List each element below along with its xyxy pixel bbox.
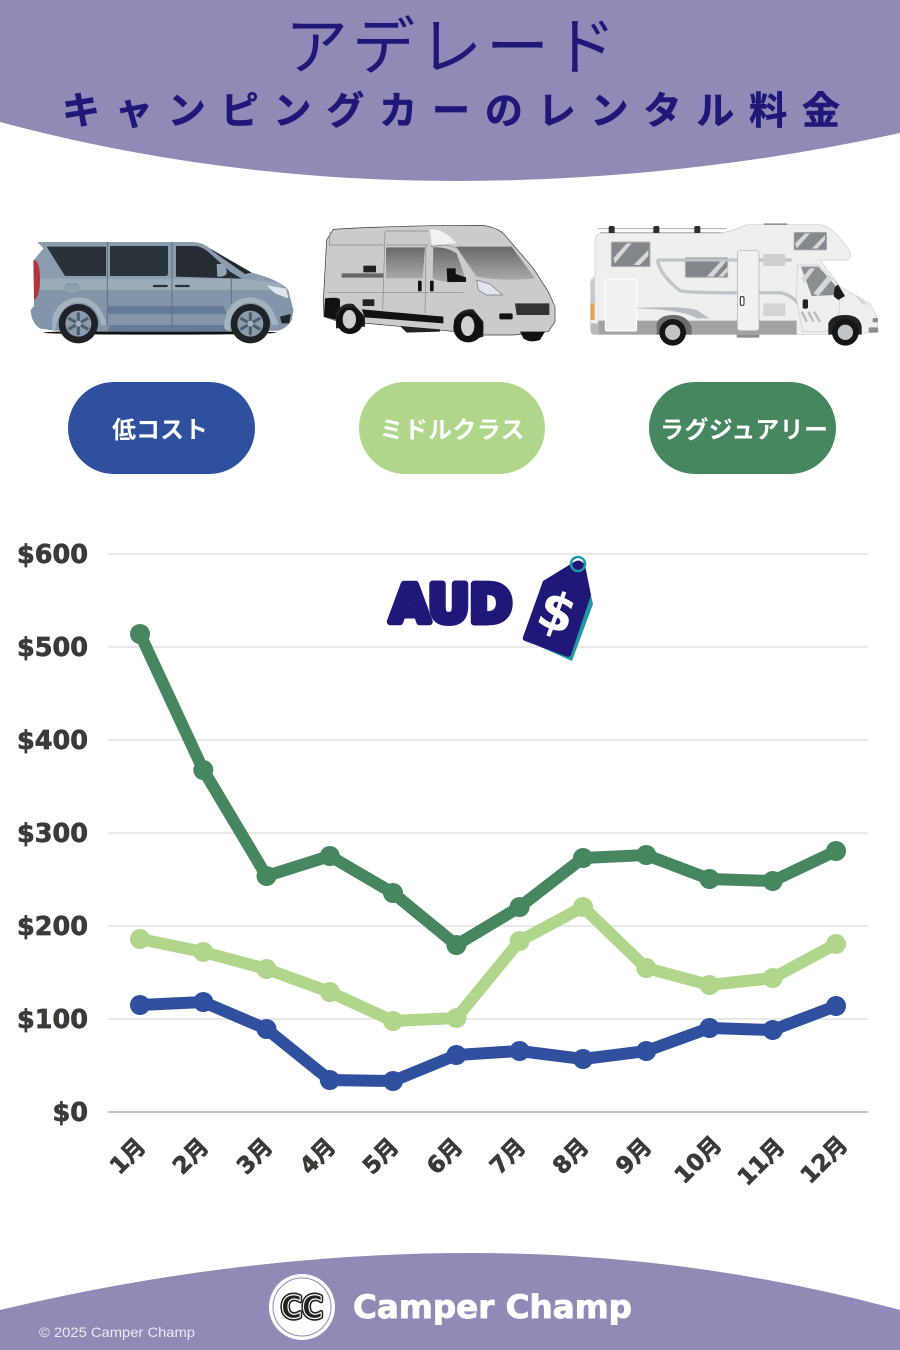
brand name: Camper Champ <box>353 1288 632 1326</box>
title: アデレード <box>285 13 616 83</box>
icon: price tag <box>523 557 593 661</box>
logo: Camper Champ: CC <box>281 1290 323 1326</box>
vehicle: panel van <box>323 225 555 342</box>
footer banner <box>0 1253 900 1350</box>
y axis labels: $500 <box>17 633 88 663</box>
y axis labels: $200 <box>17 912 88 942</box>
pill: middle class: ミドルクラス <box>380 417 524 444</box>
x axis labels: 12月 <box>796 1132 853 1189</box>
vehicle: minivan <box>31 242 293 343</box>
x axis labels: 3月 <box>232 1134 278 1180</box>
pill: low cost <box>68 382 255 474</box>
currency label: AUD <box>390 575 512 635</box>
logo: Camper Champ <box>269 1274 335 1340</box>
x axis labels: 8月 <box>548 1134 594 1180</box>
x axis labels: 5月 <box>358 1134 404 1180</box>
pill: middle class <box>359 382 545 474</box>
y axis labels: $100 <box>17 1005 88 1035</box>
pill: low cost: 低コスト <box>112 417 208 444</box>
copyright: © 2025 Camper Champ <box>39 1324 195 1340</box>
series: luxury <box>130 624 846 955</box>
vehicle: motorhome <box>590 224 878 346</box>
x axis labels: 9月 <box>611 1134 657 1180</box>
subtitle: キャンピングカーのレンタル料金 <box>62 91 840 133</box>
x axis labels: 10月 <box>670 1132 727 1189</box>
x axis labels: 6月 <box>422 1134 468 1180</box>
y axis labels: $0 <box>52 1098 88 1128</box>
pill: luxury <box>649 382 836 474</box>
x axis labels: 1月 <box>105 1134 151 1180</box>
series: middle class <box>130 897 846 1031</box>
y axis labels <box>17 540 88 1128</box>
pill: luxury: ラグジュアリー <box>660 416 828 444</box>
x axis labels: 7月 <box>485 1134 531 1180</box>
y axis labels: $300 <box>17 819 88 849</box>
x axis labels: 4月 <box>295 1134 341 1180</box>
y axis labels: $400 <box>17 726 88 756</box>
logo: Camper Champ: CC <box>281 1290 323 1326</box>
series: low cost <box>130 992 846 1091</box>
y axis labels: $600 <box>17 540 88 570</box>
line chart <box>17 540 868 1191</box>
x axis labels: 11月 <box>733 1134 790 1191</box>
header banner <box>0 0 900 181</box>
x axis labels <box>105 1132 853 1191</box>
icon: price tag: $ <box>529 579 584 647</box>
x axis labels: 2月 <box>168 1134 214 1180</box>
